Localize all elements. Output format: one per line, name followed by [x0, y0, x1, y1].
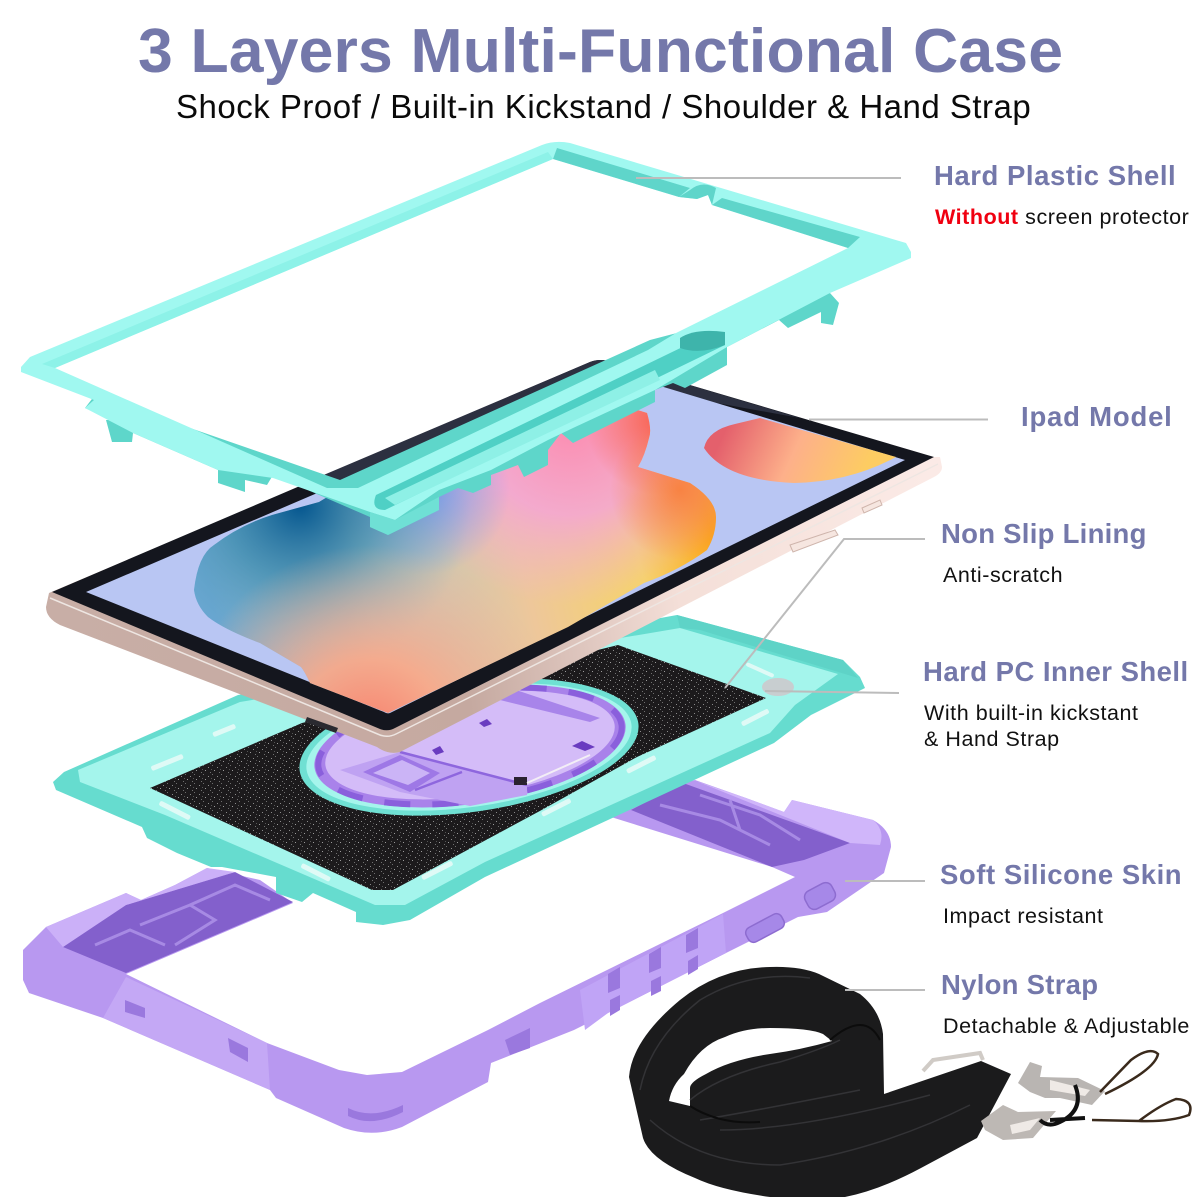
silicone rib block: [580, 914, 726, 1030]
label: soft silicone skin: Impact resistant: [943, 904, 1104, 928]
label: non slip lining: Anti-scratch: [943, 563, 1063, 587]
label: soft silicone skin: [940, 859, 1182, 928]
silicone inner wall, right: [631, 783, 850, 867]
metal clips: [1018, 1062, 1105, 1105]
wallpaper swirl: [194, 410, 716, 713]
shell clips: [85, 293, 839, 535]
label: soft silicone skin: Soft Silicone Skin: [940, 859, 1182, 890]
label: non slip lining: Non Slip Lining: [941, 518, 1147, 549]
nylon strap: [629, 967, 1190, 1197]
black non slip lining: [150, 645, 766, 890]
label: hard plastic shell: Without screen protector: [935, 205, 1189, 229]
layer: hard plastic shell: [21, 142, 911, 535]
label: non slip lining: [941, 518, 1147, 587]
wallpaper sun: [704, 418, 896, 483]
silicone inner wall, left: [63, 872, 293, 973]
label: nylon strap: Nylon Strap: [941, 969, 1098, 1000]
tablet ports and buttons: [305, 717, 338, 733]
shell notch: [679, 184, 716, 205]
rotating kickstand ring: [291, 659, 647, 835]
label: nylon strap: [941, 969, 1190, 1038]
layer: hard PC inner shell: [53, 615, 865, 925]
subtitle: Shock Proof / Built-in Kickstand / Shoulder & Hand Strap: [176, 88, 1031, 125]
port hole: [762, 678, 794, 696]
silicone ribs and buttons: [125, 928, 698, 1121]
shell inner groove top: [553, 148, 690, 197]
rubber cord and loops: [1040, 1085, 1085, 1125]
label: hard PC inner shell: Hard PC Inner Shell: [923, 656, 1189, 687]
label: ipad model: Ipad Model: [1021, 401, 1173, 432]
label: nylon strap: Detachable & Adjustable: [943, 1014, 1190, 1038]
title: 3 Layers Multi-Functional Case: [138, 16, 1063, 86]
layer: soft silicone skin: [23, 780, 891, 1133]
silicone side strip: [103, 977, 270, 1090]
layer: tablet: [46, 360, 942, 753]
label: hard PC inner shell: With built-in kickstant: [924, 701, 1139, 725]
leader lines: [636, 178, 988, 990]
label: hard plastic shell: Hard Plastic Shell: [934, 160, 1176, 191]
shell long band slot: [374, 337, 725, 510]
shell bottom corner: [370, 497, 439, 535]
label: hard PC inner shell: [923, 656, 1189, 751]
strap buckle: [923, 1053, 983, 1071]
label: hard plastic shell: [934, 160, 1189, 229]
kickstand hinge line and recess: [340, 752, 527, 806]
label: hard PC inner shell: & Hand Strap: [924, 727, 1060, 751]
